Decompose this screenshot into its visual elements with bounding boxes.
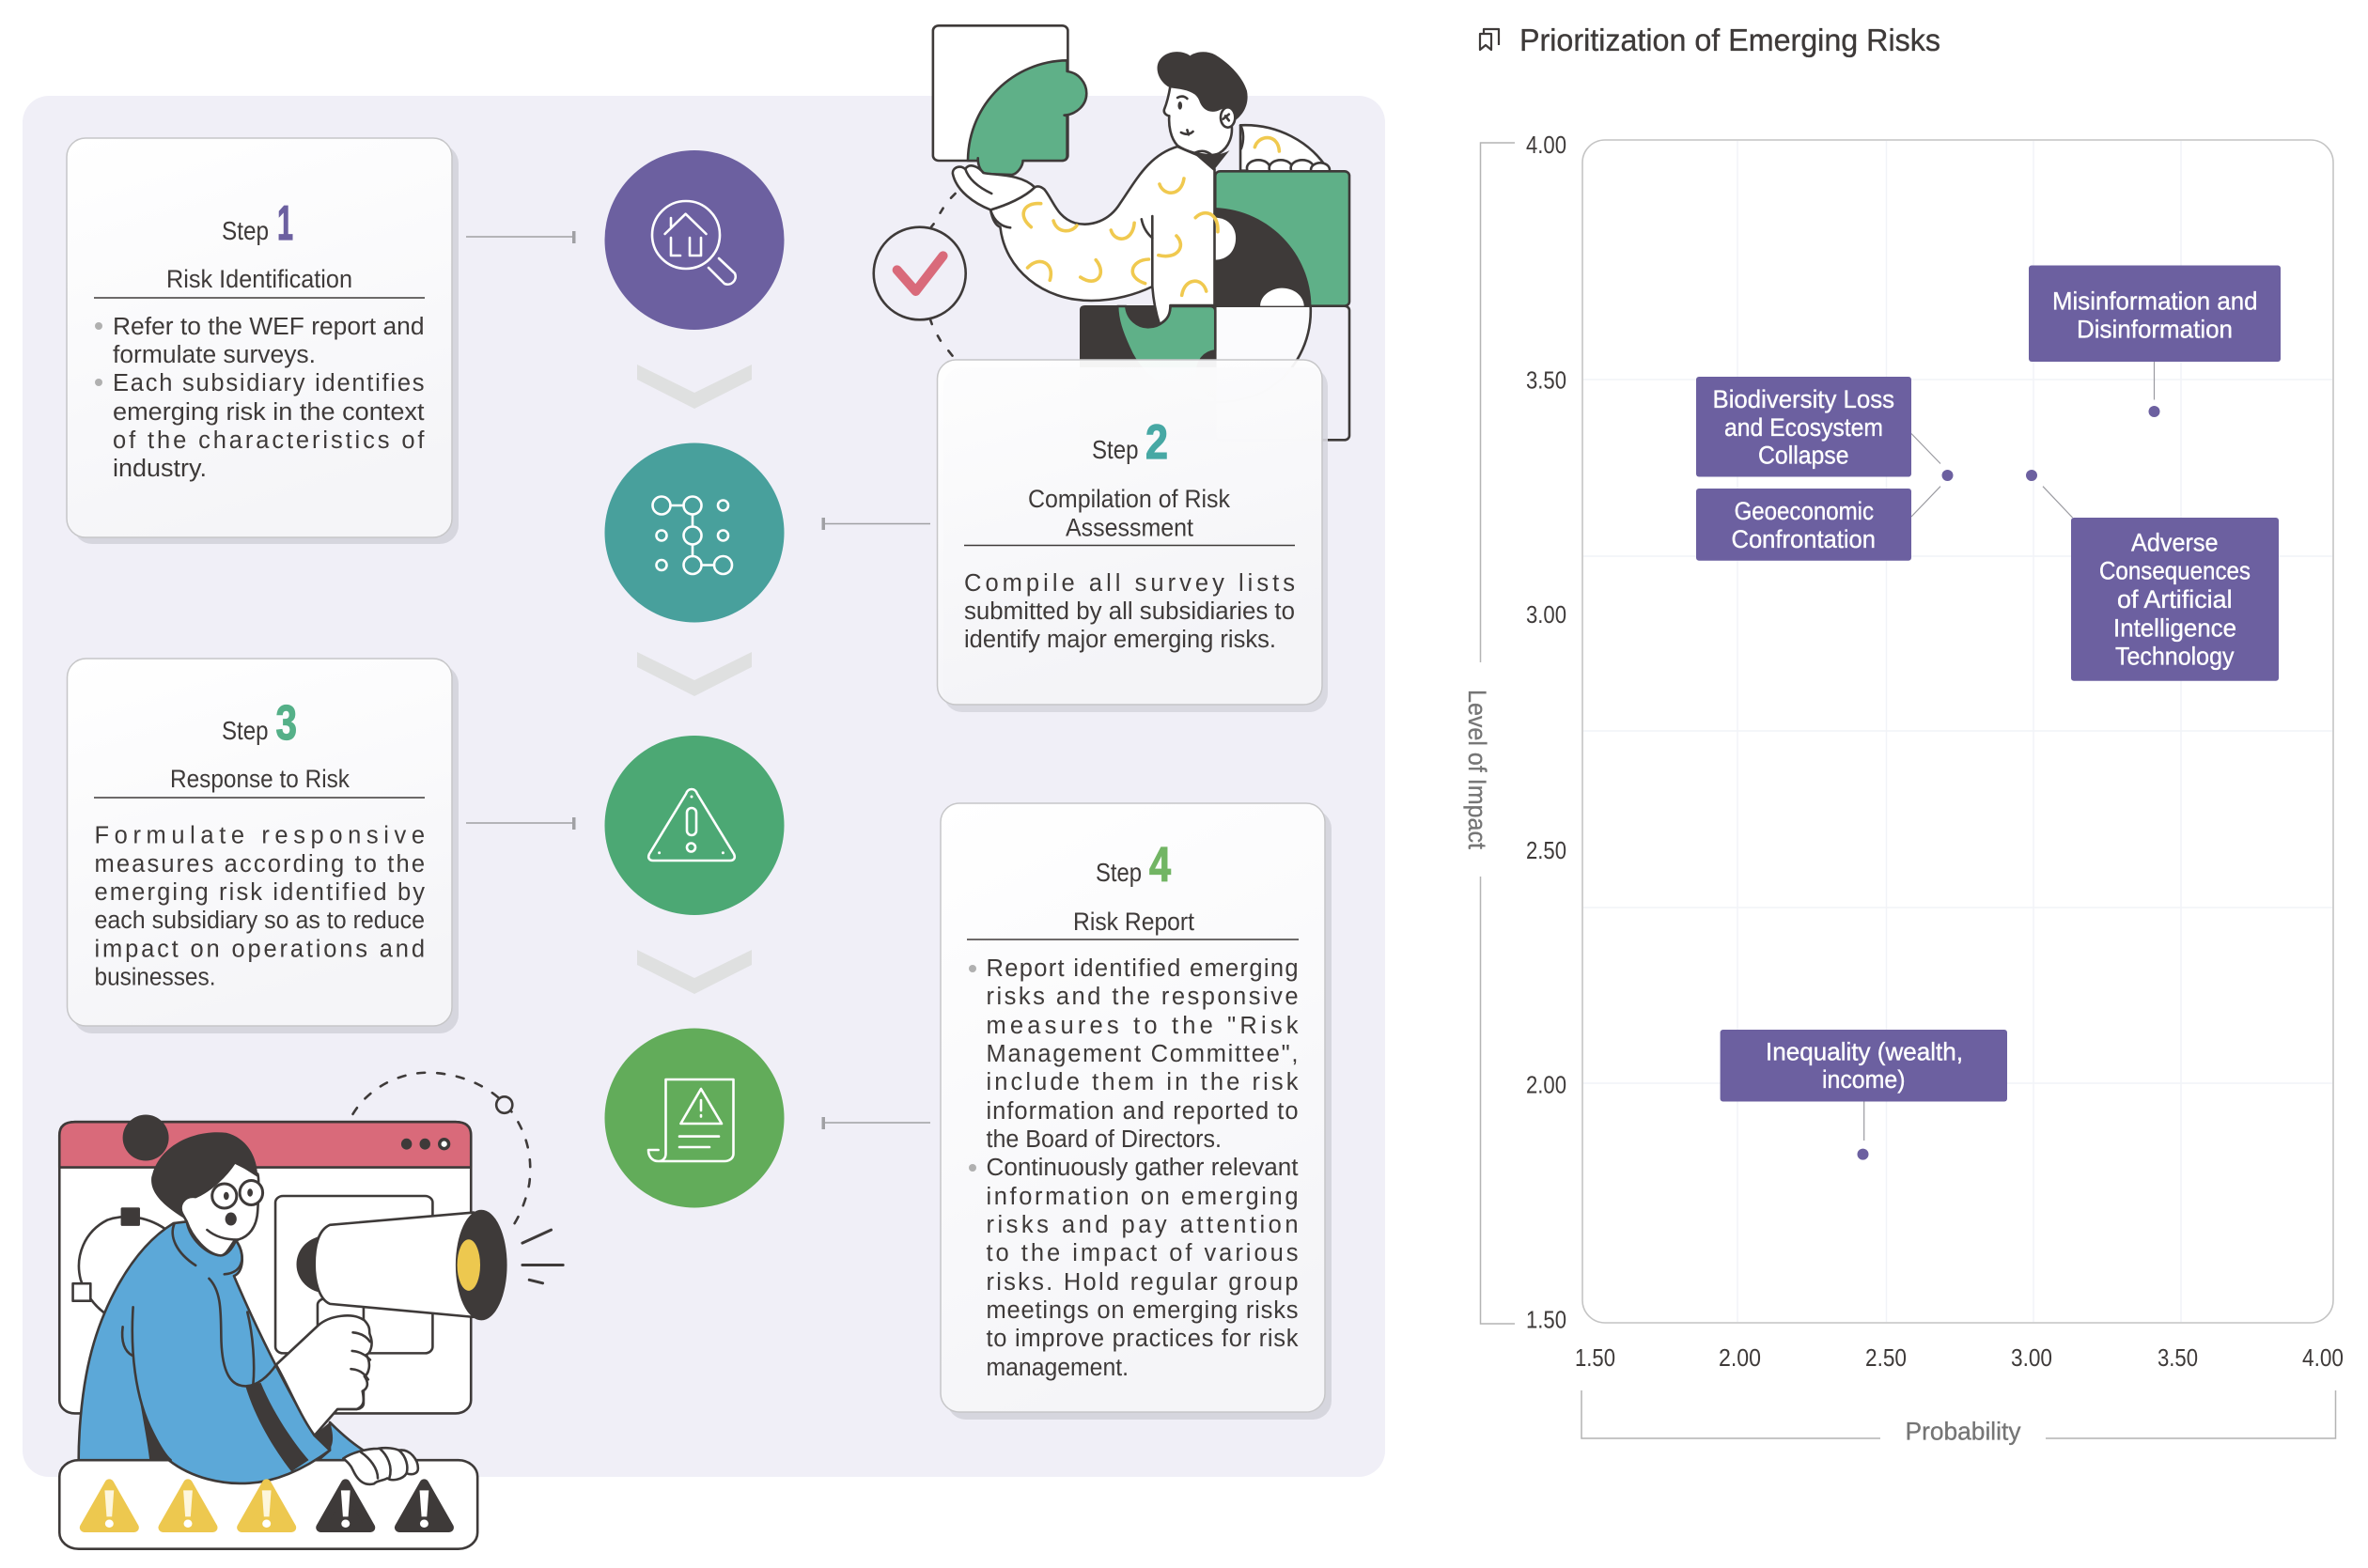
- text block: step 4 body: information on emerging: [987, 1184, 1299, 1210]
- connector: step 1: [466, 231, 575, 243]
- label: biodiversity: Collapse: [1758, 442, 1849, 470]
- text block: step 4 body: to improve practices for risk: [987, 1326, 1299, 1352]
- text block: step 1 body: [95, 314, 425, 482]
- megaphone: [297, 1210, 563, 1320]
- step circle 2: compilation icon: [605, 443, 784, 622]
- text block: step 4 body: management.: [987, 1355, 1129, 1381]
- text block: step 3 body: impact on operations and: [94, 936, 425, 962]
- warning bar: [59, 1460, 477, 1549]
- text block: step 1 body: emerging risk in the context: [113, 399, 425, 426]
- scatter chart: probability vs impact: [1463, 132, 2344, 1445]
- y axis labels: 2.50: [1526, 838, 1566, 864]
- label: adverse AI: Technology: [2115, 643, 2235, 671]
- icon: bookmark: [1480, 29, 1499, 50]
- text block: step 3 body: emerging risk identified by: [94, 879, 425, 906]
- heading: step 4: Risk Report: [1073, 908, 1195, 936]
- heading: step 3: [94, 696, 425, 798]
- heading: step 1: [94, 196, 425, 298]
- text block: step 2 body: submitted by all subsidiaries to: [964, 598, 1295, 625]
- arrow: chevron 2: [637, 652, 752, 696]
- label: misinformation: [2029, 265, 2281, 362]
- heading: step 4: 4: [1149, 838, 1171, 893]
- illustration: woman with megaphone: [59, 1073, 563, 1549]
- text block: step 3 body: businesses.: [94, 964, 216, 990]
- x axis labels: 3.50: [2158, 1345, 2198, 1372]
- text block: step 2 body: Compile all survey lists: [964, 570, 1295, 597]
- panel: step 4 card: [941, 803, 1332, 1420]
- arrow: chevron 3: [637, 950, 752, 994]
- puzzle piece: held white tile: [933, 25, 1086, 175]
- woman's head: [123, 1115, 263, 1255]
- x axis labels: 2.00: [1719, 1345, 1761, 1372]
- y axis labels: 3.00: [1526, 602, 1566, 629]
- label: biodiversity: [1696, 377, 1911, 477]
- heading: step 3: Step: [222, 716, 269, 745]
- icon: red check in circle: [874, 194, 966, 356]
- step circle 1: risk identification icon: [605, 150, 784, 330]
- step circle 3: warning icon: [605, 736, 784, 915]
- connector: step 2: [821, 518, 930, 530]
- warning triangle icons: [85, 1483, 449, 1528]
- x axis title: Probability: [1906, 1417, 2021, 1445]
- dashed sound arc: [353, 1073, 530, 1230]
- heading: step 2: [964, 415, 1295, 545]
- label: adverse AI: Intelligence: [2113, 614, 2236, 643]
- y axis labels: 3.50: [1526, 368, 1566, 395]
- text block: step 3 body: [94, 823, 425, 990]
- y axis labels: 4.00: [1526, 132, 1566, 159]
- text block: step 4 body: information and reported to: [987, 1098, 1299, 1125]
- label: inequality: income): [1822, 1065, 1906, 1094]
- connector: step 4: [821, 1117, 930, 1129]
- woman's hand on bar: [343, 1448, 418, 1484]
- text block: step 4 body: Management Committee",: [987, 1041, 1299, 1067]
- heading: step 1: Step: [222, 216, 269, 245]
- background panel: [23, 96, 1385, 1477]
- text block: step 4 body: measures to the "Risk: [987, 1013, 1299, 1039]
- y axis bracket: [1481, 143, 1515, 1324]
- label: adverse AI: Consequences: [2099, 557, 2251, 585]
- data points: [1857, 406, 2159, 1160]
- text block: step 4 body: the Board of Directors.: [987, 1126, 1222, 1153]
- text block: step 3 body: Formulate responsive: [94, 823, 425, 849]
- connector: step 3: [466, 817, 575, 830]
- x axis labels: 3.00: [2011, 1345, 2052, 1372]
- heading: step 2: Assessment: [1066, 513, 1194, 541]
- woman's body: [79, 1221, 365, 1483]
- x axis labels: 4.00: [2302, 1345, 2344, 1372]
- puzzle tile: upper right green: [1214, 171, 1349, 306]
- text block: step 4 body: meetings on emerging risks: [987, 1297, 1299, 1324]
- heading: step 1: 1: [277, 196, 293, 251]
- label: misinformation: Disinformation: [2077, 316, 2233, 344]
- y axis labels: [1526, 132, 1566, 1334]
- woman's arm and hand: [209, 1279, 372, 1436]
- arrow: chevron 1: [637, 365, 752, 409]
- chart plot area: [1582, 140, 2333, 1323]
- text block: step 4 body: [969, 955, 1299, 1381]
- text block: step 4 body: Report identified emerging: [987, 955, 1299, 982]
- panel: step 2 card: [938, 360, 1328, 712]
- browser window: [59, 1122, 471, 1413]
- man's hand: [953, 165, 1035, 210]
- label: inequality: [1721, 1030, 2007, 1101]
- text block: step 2 body: identify major emerging risks.: [964, 627, 1276, 653]
- heading: step 4: Step: [1096, 858, 1142, 887]
- leader lines: [1864, 362, 2154, 1141]
- man's back: [1240, 125, 1330, 177]
- label: adverse AI: of Artificial: [2117, 585, 2233, 613]
- text block: step 2 body: [964, 570, 1295, 653]
- text block: step 4 body: Continuously gather relevant: [987, 1155, 1299, 1181]
- text block: step 4 body: risks. Hold regular group: [987, 1269, 1299, 1296]
- text block: step 3 body: each subsidiary so as to reduce: [94, 908, 425, 934]
- y axis labels: 2.00: [1526, 1073, 1566, 1099]
- label: misinformation: Misinformation and: [2052, 287, 2257, 316]
- step circle 4: report icon: [605, 1028, 784, 1208]
- heading: step 2: Step: [1092, 435, 1139, 464]
- x axis labels: 2.50: [1865, 1345, 1907, 1372]
- puzzle tile: lower right: [1215, 306, 1349, 440]
- illustration: man with puzzle: [874, 25, 1349, 440]
- heading: step 2: Compilation of Risk: [1028, 485, 1231, 513]
- text block: step 1 body: formulate surveys.: [113, 342, 316, 368]
- text block: step 4 body: risks and the responsive: [987, 984, 1299, 1010]
- x axis labels: [1575, 1345, 2344, 1372]
- panel: step 3 card: [68, 659, 459, 1033]
- chart title: Prioritization of Emerging Risks: [1519, 23, 1940, 57]
- x axis labels: 1.50: [1575, 1345, 1615, 1372]
- label: adverse AI: [2071, 518, 2279, 681]
- text block: step 1 body: of the characteristics of: [113, 427, 425, 454]
- text block: step 4 body: include them in the risk: [987, 1069, 1299, 1095]
- label: biodiversity: and Ecosystem: [1724, 413, 1883, 442]
- text block: step 1 body: Each subsidiary identifies: [113, 370, 425, 396]
- text block: step 4 body: risks and pay attention: [987, 1212, 1299, 1238]
- text block: step 3 body: measures according to the: [94, 851, 425, 877]
- man's sleeve and torso: [990, 147, 1230, 324]
- heading: step 1: Risk Identification: [166, 265, 352, 293]
- label: geoeconomic: [1696, 489, 1911, 561]
- label: inequality: Inequality (wealth,: [1766, 1038, 1963, 1066]
- panel: step 1 card: [67, 138, 459, 544]
- heading: step 2: 2: [1145, 415, 1168, 470]
- text block: step 1 body: industry.: [113, 456, 207, 482]
- y axis title: Level of Impact: [1463, 690, 1491, 850]
- heading: step 3: 3: [276, 696, 297, 751]
- text block: step 4 body: to the impact of various: [987, 1240, 1299, 1266]
- heading: step 4: [967, 838, 1299, 939]
- label: adverse AI: Adverse: [2131, 528, 2219, 556]
- man's head: [1158, 52, 1248, 155]
- heading: step 3: Response to Risk: [170, 765, 351, 793]
- puzzle tile: lower left: [1080, 305, 1215, 440]
- text block: step 1 body: Refer to the WEF report and: [113, 314, 424, 340]
- y axis labels: 1.50: [1526, 1308, 1566, 1334]
- label: biodiversity: Biodiversity Loss: [1712, 385, 1894, 413]
- label: geoeconomic: Confrontation: [1731, 525, 1876, 553]
- label: geoeconomic: Geoeconomic: [1735, 497, 1874, 525]
- x axis bracket: [1581, 1390, 2336, 1438]
